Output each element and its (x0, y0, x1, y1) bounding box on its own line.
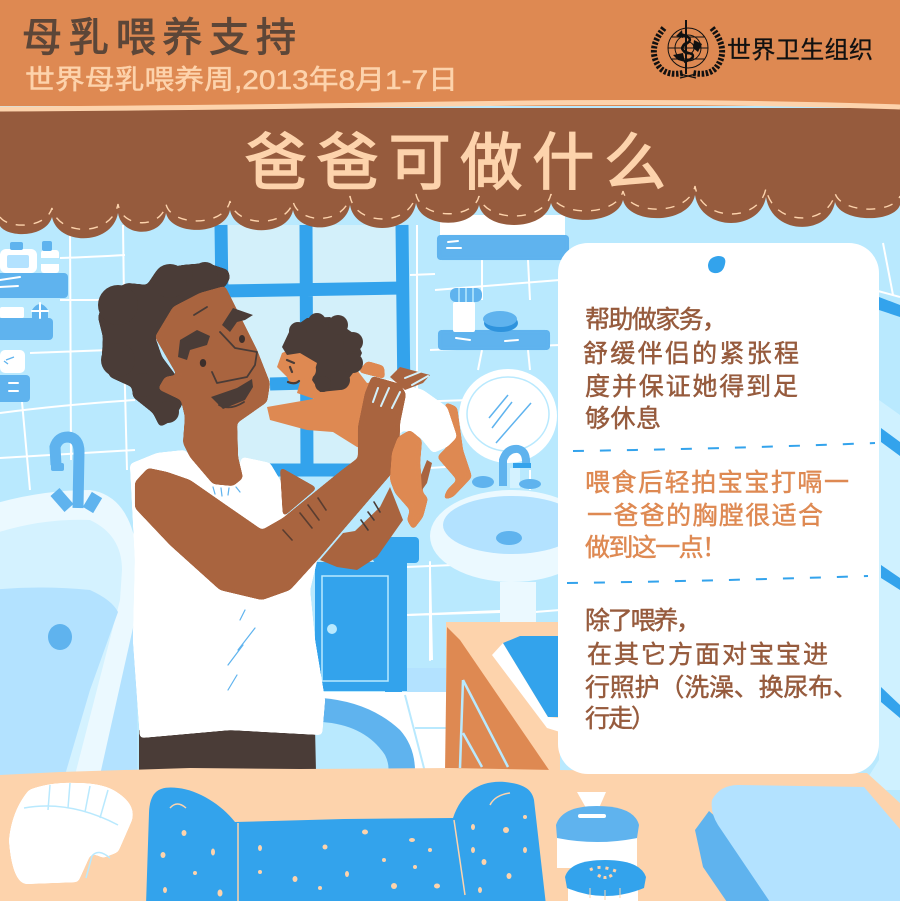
header: orange band (0, 0, 900, 109)
item: white objects above shelf (440, 215, 565, 237)
text: tip three: 除了喂养， (585, 607, 701, 635)
text: tip three: 行照护（洗澡、换尿布、 (585, 674, 858, 702)
icon: jar (450, 288, 482, 332)
baby: shoulder (358, 361, 385, 379)
sink (430, 449, 594, 624)
baby: body and arm (267, 370, 385, 450)
right wall stripes (879, 297, 900, 718)
subheading: campaign date: 世界母乳喂养周,2013年8月1-7日 (25, 65, 458, 95)
father: white vest (130, 450, 325, 738)
father: other forearm (320, 487, 403, 570)
text: tip one: 够休息 (585, 405, 661, 433)
shelves: upper left (0, 241, 68, 402)
icon: sink tap (472, 449, 541, 489)
father: forearm hair (361, 502, 380, 530)
father: trousers (139, 727, 316, 772)
father: raised arm and hand (135, 367, 430, 600)
icon: diaper on counter (9, 783, 133, 884)
text: tip one: 帮助做家务， (585, 306, 727, 334)
mirror (459, 369, 557, 463)
icon: bath tap (51, 437, 97, 510)
baby: body (267, 313, 472, 500)
text: tip two: 喂食后轻拍宝宝打嗝一 (585, 469, 849, 497)
panel: window (220, 225, 404, 470)
towel: folded blue with dots (146, 782, 546, 901)
icon: box on shelf (0, 242, 37, 273)
father: eyes and nose (194, 307, 257, 383)
icon: small dome jar (0, 303, 48, 318)
father: vest creases (213, 487, 255, 690)
baby: hair (282, 313, 363, 392)
father: eyebrows (178, 308, 253, 360)
icon: stacked soap (0, 350, 25, 373)
shelf: upper right (437, 235, 569, 350)
text: tip one (583, 306, 799, 433)
text: tip two: 做到这一点！ (585, 534, 727, 562)
icon: bottle on shelf (41, 241, 59, 273)
cabinet (315, 537, 419, 703)
baby: face features (287, 360, 299, 383)
text: tip one: 舒缓伴侣的紧张程 (583, 340, 799, 368)
text: tip three (585, 607, 858, 733)
baby: ear (298, 361, 316, 379)
text: tip one: 度并保证她得到足 (585, 373, 798, 401)
text: tip three: 行走） (585, 705, 656, 733)
awning: brown scalloped title band (0, 108, 900, 238)
baby: far leg (437, 402, 472, 500)
father: mouth (211, 379, 253, 409)
icon: sink drain (496, 531, 522, 545)
icon: tag hole (708, 256, 725, 273)
towel on table (492, 636, 560, 732)
icon: soap dish (483, 311, 518, 332)
baby: leg shadow (421, 460, 432, 490)
icon: wipes container (556, 792, 646, 901)
icon: tub drain (48, 624, 72, 650)
text: tip two (585, 469, 849, 562)
father: neck and face (155, 286, 270, 486)
father: chest wedge (280, 467, 317, 517)
father: upper fingers (390, 367, 430, 390)
panel: information tag (558, 243, 879, 774)
logo text: WHO name: 世界卫生组织 (727, 37, 873, 64)
panel: bathroom background (0, 200, 900, 901)
title: 爸爸可做什么 (245, 129, 666, 198)
scene: counter top (0, 768, 900, 901)
text: tip two: 一爸爸的胸膛很适合 (587, 502, 823, 530)
father: body and head (98, 262, 403, 772)
baby: head (277, 345, 330, 400)
heading: campaign title: 母乳喂养支持 (22, 16, 296, 60)
side table (445, 622, 560, 772)
baby: near leg (390, 430, 432, 530)
text: tip three: 在其它方面对宝宝进 (587, 641, 828, 669)
baby: diaper (383, 378, 457, 453)
father: arm hair (283, 498, 326, 540)
folded towel right (695, 785, 900, 901)
bathtub (0, 490, 140, 775)
father: finger highlights (373, 372, 428, 408)
icon: WHO emblem (654, 20, 722, 78)
floor and toilet (322, 668, 447, 775)
stitches (0, 186, 900, 229)
father: hair (98, 262, 230, 427)
